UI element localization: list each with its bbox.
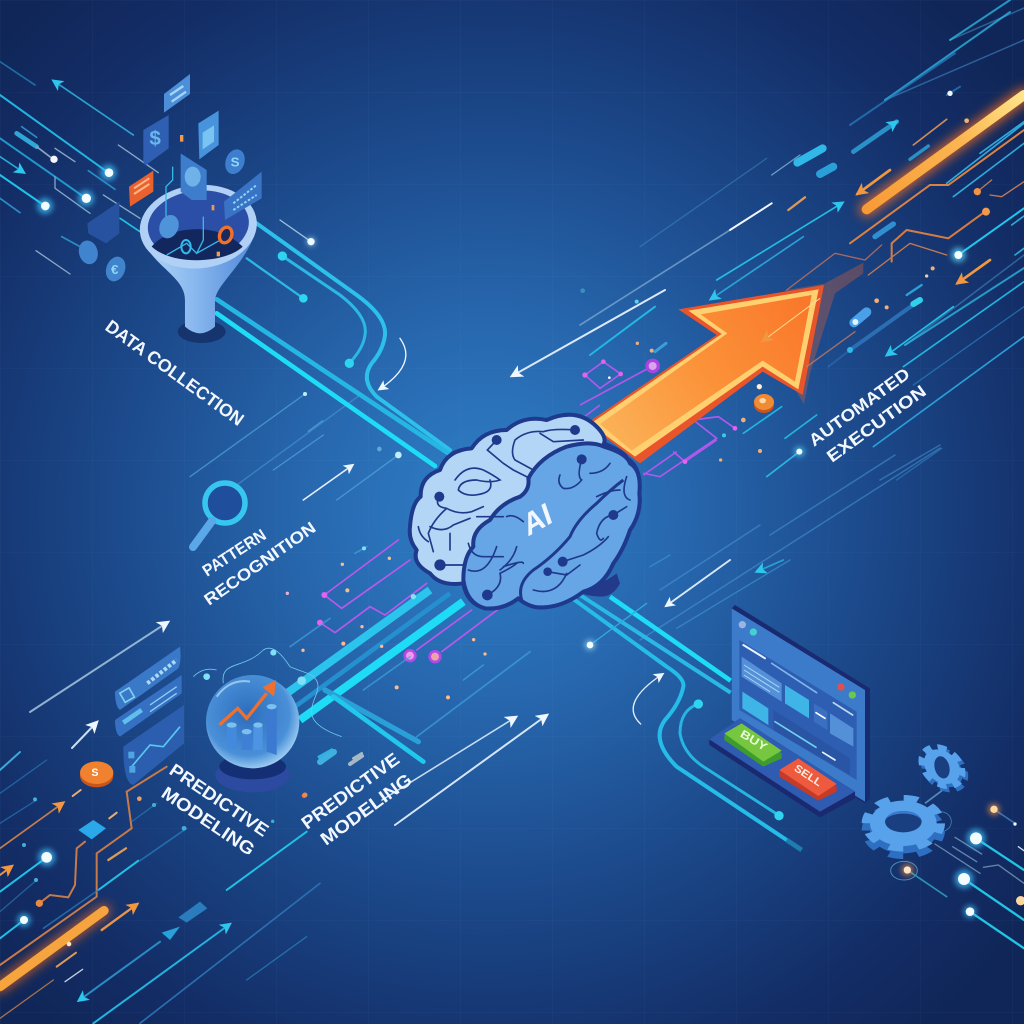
screen inner panel bbox=[739, 640, 857, 780]
glow node lower bbox=[767, 446, 805, 477]
glow nodes bbox=[0, 849, 55, 938]
curved white arrow bbox=[379, 338, 406, 389]
icon: orange coin bbox=[754, 394, 774, 413]
white arrow bbox=[666, 560, 730, 606]
label: automated execution bbox=[805, 364, 930, 466]
label: data collection: DATA COLLECTION bbox=[102, 316, 248, 430]
blue tile bbox=[78, 820, 106, 839]
small capsule bbox=[854, 312, 867, 323]
glow traces bbox=[0, 95, 116, 214]
arrow motion smear bbox=[783, 263, 863, 404]
orange ring bbox=[217, 225, 234, 245]
icon: data collection funnel bbox=[76, 74, 262, 343]
sell button: SELL bbox=[792, 762, 824, 790]
screen text bars bbox=[743, 645, 853, 760]
card: right panel bbox=[224, 172, 262, 220]
sparks bbox=[180, 135, 220, 256]
large gear bbox=[866, 798, 941, 856]
top right streak field bbox=[580, 53, 1024, 480]
white arrow above brain bbox=[512, 290, 665, 376]
card: dollar: $ bbox=[149, 127, 161, 150]
cyan arrow left pointing bbox=[711, 237, 803, 299]
card: dollar bbox=[143, 115, 169, 165]
orange circuit long bbox=[850, 130, 1024, 243]
card: chart top bbox=[115, 647, 181, 710]
coin in funnel bbox=[156, 212, 182, 241]
funnel rim bbox=[136, 179, 261, 274]
ring behind gear bbox=[930, 812, 951, 832]
orange arrows bbox=[857, 170, 890, 194]
label: pattern recognition: PATTERN bbox=[199, 526, 270, 580]
upper curved line bbox=[257, 223, 450, 450]
tray bbox=[709, 718, 855, 817]
back lobe bbox=[410, 415, 640, 609]
label: predictive modeling right: MODELING bbox=[317, 770, 416, 849]
coin right bbox=[222, 147, 248, 177]
swirl nodes bbox=[203, 650, 306, 685]
card: orange bbox=[129, 171, 153, 207]
icon: crystal ball bbox=[193, 648, 342, 792]
globe bbox=[206, 675, 299, 768]
coin left bbox=[76, 238, 100, 266]
short line with node bbox=[247, 258, 308, 303]
small accents near ball bbox=[302, 752, 362, 798]
coin left lower: € bbox=[111, 262, 119, 277]
white arrow to the right bbox=[303, 465, 353, 500]
label: predictive modeling right bbox=[298, 749, 416, 849]
label: predictive modeling left bbox=[158, 760, 272, 860]
orange streak bbox=[867, 95, 1024, 209]
ball base bbox=[215, 758, 290, 792]
data lines: upper left to center bbox=[190, 220, 450, 500]
purple nodes bbox=[317, 592, 442, 663]
inner curved line bbox=[680, 699, 784, 820]
lobe divider bbox=[521, 480, 623, 600]
cross bands bbox=[325, 690, 423, 762]
card: top chart bbox=[164, 74, 190, 113]
sparks bbox=[286, 557, 487, 699]
buy button: BUY bbox=[738, 728, 770, 754]
lower wire bbox=[868, 243, 947, 275]
data lines: lower left to center, purple circuits bbox=[286, 540, 530, 762]
cyan arrow bbox=[757, 560, 783, 572]
window dots bbox=[739, 621, 856, 769]
orange arrows bbox=[0, 803, 63, 848]
white fading line bbox=[580, 230, 730, 325]
arrow red edge bbox=[587, 285, 824, 463]
cyan arrow bbox=[717, 203, 843, 280]
card: lower chart bbox=[123, 705, 184, 785]
coin: dollar bbox=[80, 761, 113, 787]
cyan arrow up-right bbox=[93, 924, 230, 1023]
label: predictive modeling left: MODELING bbox=[158, 783, 258, 860]
screen cards bbox=[742, 657, 853, 775]
label: pattern recognition: RECOGNITION bbox=[201, 519, 319, 609]
terminal dark edge bbox=[732, 605, 870, 803]
cyan arrow bbox=[53, 81, 133, 135]
icon: left prediction cards bbox=[80, 647, 184, 787]
coin right: S bbox=[231, 155, 240, 170]
white glow node bbox=[280, 220, 316, 246]
card: center bbox=[181, 153, 207, 200]
bars bbox=[227, 704, 277, 755]
orange growth arrow bbox=[587, 263, 863, 463]
cyan arrow lower-left bbox=[79, 942, 160, 1001]
label: AI on brain: AI bbox=[515, 498, 559, 543]
orange circuit long bbox=[0, 767, 167, 965]
small gear bbox=[914, 739, 973, 798]
cyan arrow pointing left bbox=[887, 307, 953, 355]
main double band bbox=[217, 299, 448, 466]
lower left streak field bbox=[0, 760, 320, 1023]
buy button bbox=[724, 723, 782, 767]
label: automated execution: EXECUTION bbox=[823, 382, 930, 466]
triangle and pill bbox=[162, 902, 207, 940]
lower cyan streaks bbox=[743, 282, 1024, 438]
swirl lines bbox=[193, 648, 342, 737]
inner curved line with node bbox=[278, 251, 365, 368]
glow traces bbox=[964, 838, 1024, 948]
label: automated execution: AUTOMATED bbox=[805, 364, 913, 450]
card: document bbox=[198, 111, 219, 159]
funnel inner bbox=[144, 186, 252, 264]
top left nodes and traces bbox=[0, 62, 158, 274]
fold lines bbox=[418, 429, 630, 595]
brain stem bbox=[573, 573, 620, 597]
glow nodes bbox=[901, 803, 1024, 918]
line terminal bbox=[787, 840, 802, 850]
label: predictive modeling left: PREDICTIVE bbox=[166, 760, 272, 841]
bands bbox=[287, 590, 463, 720]
thin arrow inside bbox=[763, 298, 820, 341]
cyan streaks bbox=[98, 861, 138, 890]
card: dark map bbox=[87, 202, 119, 243]
icon: magnifying glass bbox=[193, 483, 245, 547]
nodes bbox=[434, 425, 618, 600]
coin left lower bbox=[103, 254, 129, 284]
arrow yellow edge bbox=[590, 289, 819, 457]
curved white arrow bbox=[633, 674, 663, 724]
icon: gears bbox=[866, 739, 973, 856]
card: middle bbox=[115, 675, 182, 737]
lower right nodes and traces bbox=[891, 803, 1024, 948]
trend arrow bbox=[219, 693, 267, 725]
white arrows lower left bbox=[0, 622, 547, 825]
faint cyan traces bbox=[290, 547, 530, 737]
orange circuit with node bbox=[892, 208, 990, 262]
pill with white node bbox=[17, 133, 58, 163]
pills bbox=[797, 148, 823, 163]
label: predictive modeling right: PREDICTIVE bbox=[298, 749, 403, 833]
rocket arrow bbox=[853, 122, 897, 152]
glow node right bbox=[951, 208, 1024, 262]
coin: dollar: S bbox=[91, 767, 98, 779]
glow node bbox=[585, 603, 647, 650]
upper wire bbox=[977, 180, 1024, 197]
data lines: lower right from center bbox=[570, 555, 802, 850]
curved line to lower right bbox=[570, 597, 787, 840]
arrow fill bbox=[600, 295, 812, 451]
ring bbox=[891, 861, 917, 880]
funnel dark pool bbox=[152, 229, 243, 260]
sell button bbox=[779, 758, 837, 801]
orange wire with node bbox=[36, 842, 85, 907]
faint diagonal streaks bbox=[230, 0, 1024, 640]
front lobe bbox=[463, 443, 640, 609]
pill line bbox=[850, 300, 920, 350]
purple traces bbox=[320, 540, 502, 652]
purple circuits: upper right bbox=[580, 359, 737, 477]
sparks bbox=[580, 91, 969, 462]
terminal screen bbox=[732, 608, 865, 802]
icon: trading terminal bbox=[709, 605, 870, 817]
upper right parallel streaks bbox=[947, 122, 1024, 255]
icon: AI brain bbox=[410, 415, 640, 609]
connector bbox=[925, 788, 945, 803]
highlight bbox=[217, 681, 250, 697]
main band bbox=[580, 595, 731, 693]
funnel body bbox=[142, 230, 256, 333]
funnel shadow bbox=[178, 320, 226, 343]
funnel circuit bbox=[166, 167, 223, 255]
orange streak bbox=[0, 911, 104, 987]
faint traces bbox=[190, 394, 398, 500]
